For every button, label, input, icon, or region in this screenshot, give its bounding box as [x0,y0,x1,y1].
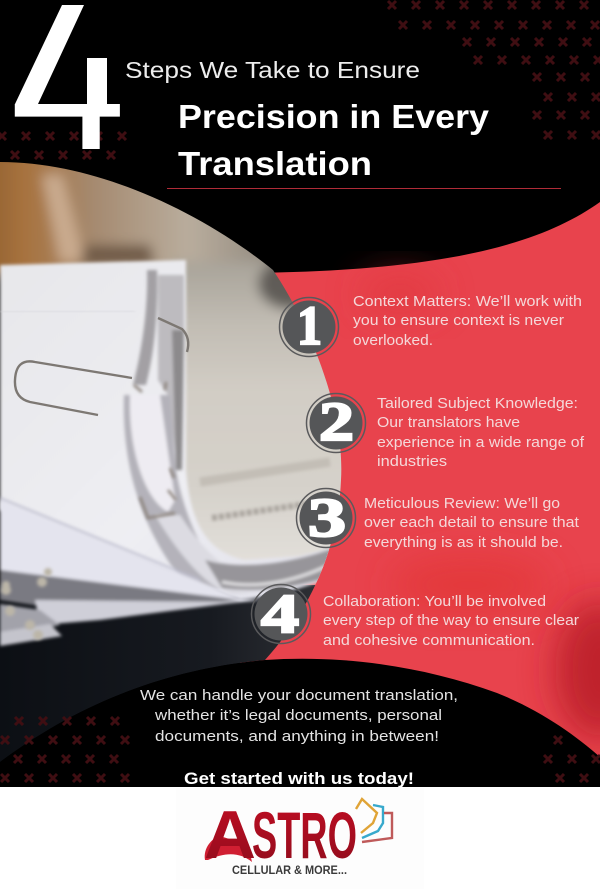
step 4 text: Collaboration: You’ll be involved [323,594,546,610]
sheet inner fold line [0,310,2,312]
dark lower area [0,585,316,762]
step 1 text: overlooked. [353,333,433,349]
step 3 badge: 3 [308,487,346,548]
title: Precision in Every [178,98,490,135]
step 3 text: everything is as it should be. [364,535,563,551]
step 1 badge: 1 [297,295,322,356]
title divider [167,188,561,189]
step 2 badge: 2 [319,391,354,452]
lower page fan [0,498,262,646]
step 2 text: experience in a wide range of [377,435,585,451]
step 3 text: Meticulous Review: We’ll go [364,496,560,512]
step 1 text: Context Matters: We’ll work with [353,294,582,310]
step 4 text [323,594,579,649]
step 4 badge [252,583,310,644]
call to action: Get started with us today! [184,770,414,788]
step 1 badge [280,295,338,356]
blurred page text [200,462,340,518]
closing text [140,687,458,745]
step 3 badge [296,487,356,548]
title [125,57,490,182]
step 1 text [353,294,582,349]
step 3 text: over each detail to ensure that [364,515,579,531]
bottom cross pattern [0,711,600,787]
step 2 text: Our translators have [377,415,520,431]
logo: STRO [252,798,357,872]
logo swoosh [205,836,252,862]
step 2 text: industries [377,454,447,470]
step 4 badge: 4 [261,583,299,644]
logo book icon [356,799,392,842]
title: Translation [178,145,372,182]
title: Steps We Take to Ensure [125,57,420,83]
step 4 text: and cohesive communication. [323,633,535,649]
step 2 text [377,396,585,470]
step 3 text [364,496,579,551]
step 4 text: every step of the way to ensure clear [323,613,579,629]
second paper clip [158,318,188,352]
fold shadows [124,270,340,595]
logo: A [204,797,256,873]
panel: paper photo [0,150,360,775]
panel: red steps area [240,202,600,790]
logo [176,788,424,889]
paper clip heads [1,568,52,640]
step 1 text: you to ensure context is never [353,313,564,329]
logo: CELLULAR & MORE... [232,865,347,877]
decorative cross pattern [0,0,600,165]
closing text: documents, and anything in between! [155,728,439,745]
step 2 text: Tailored Subject Knowledge: [377,396,578,412]
paper clip [15,361,132,415]
footer band [0,787,600,889]
front sheet [0,260,340,600]
step 2 badge [306,391,366,452]
closing text: whether it’s legal documents, personal [154,707,442,724]
closing text: We can handle your document translation, [140,687,458,704]
bottom black arc [0,659,600,790]
